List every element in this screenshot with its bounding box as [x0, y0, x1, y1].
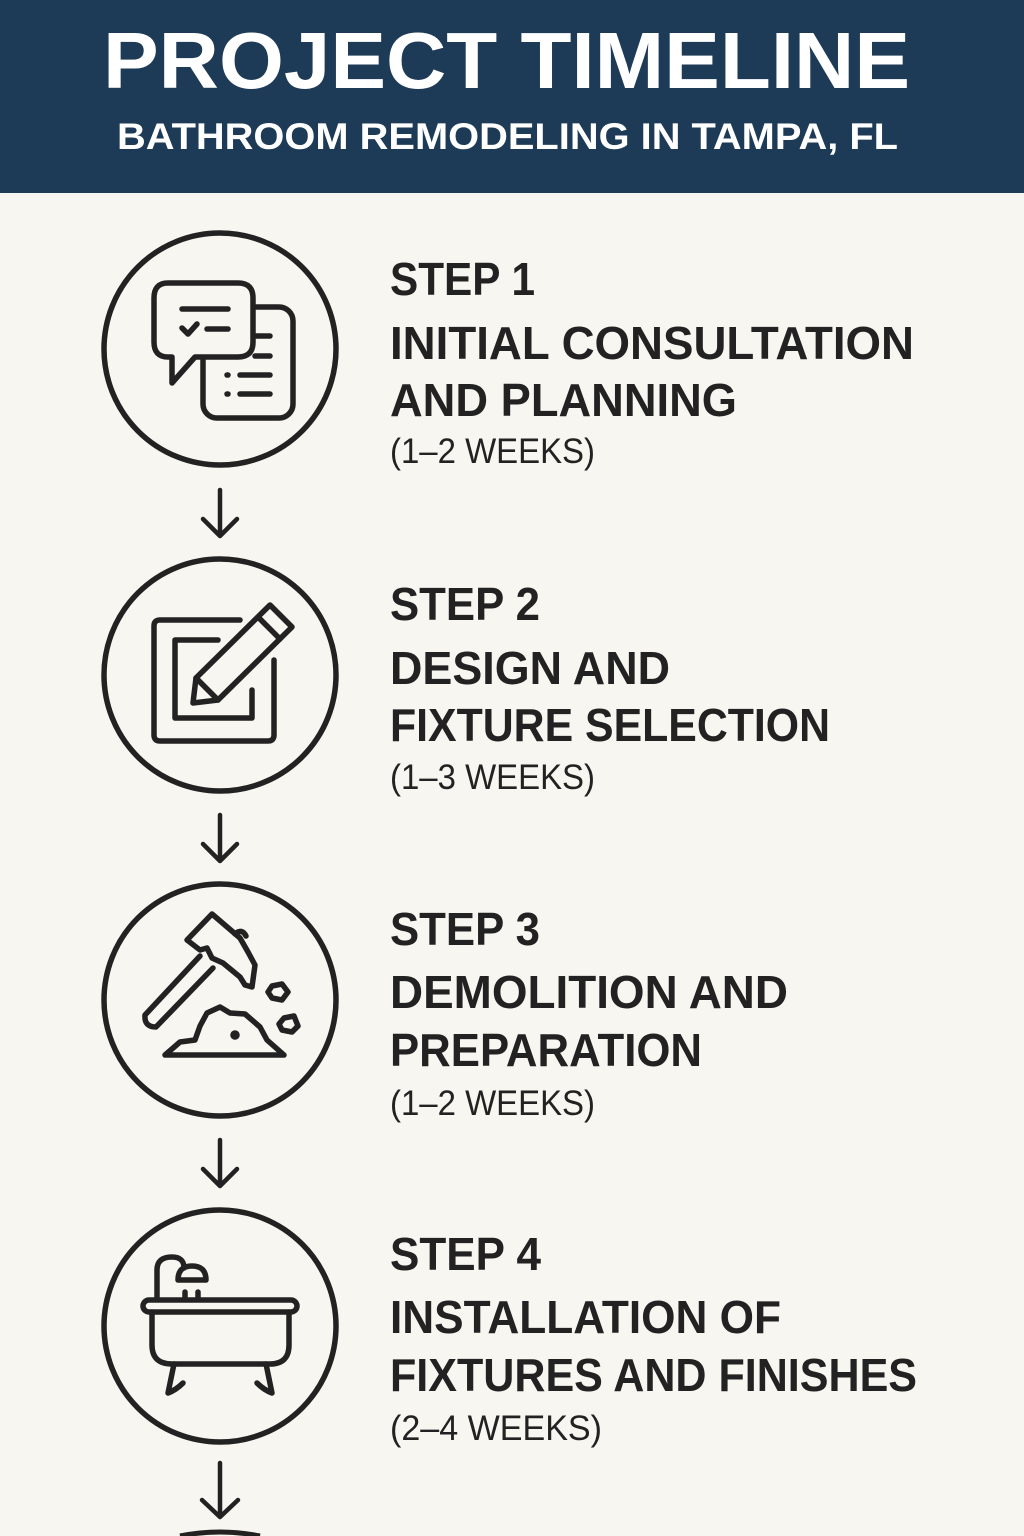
step 3 text: DEMOLITION AND — [390, 966, 788, 1018]
step 3 text — [390, 903, 788, 1123]
step 2 text: FIXTURE SELECTION — [390, 699, 830, 751]
step 3 text: (1–2 WEEKS) — [390, 1084, 595, 1123]
step 1 text: (1–2 WEEKS) — [390, 432, 595, 471]
icon: hammer and rubble — [104, 884, 336, 1116]
step 2 text — [390, 578, 830, 797]
icon: bathtub with shower — [104, 1210, 336, 1442]
arrow 3 — [203, 1140, 237, 1186]
arrow 1 — [203, 490, 237, 536]
step 1 — [104, 233, 914, 471]
step 1 text: INITIAL CONSULTATION — [390, 317, 914, 369]
step 1 text: STEP 1 — [390, 253, 535, 305]
step 2 text: (1–3 WEEKS) — [390, 758, 595, 797]
step 4 text — [390, 1228, 917, 1448]
icon: design pencil — [104, 559, 336, 791]
arrow 2 — [203, 815, 237, 861]
title: PROJECT TIMELINE — [103, 16, 910, 105]
icon: consultation chat and document — [104, 233, 336, 465]
step 5 circle (cropped) — [180, 1532, 260, 1536]
step 4 text: FIXTURES AND FINISHES — [390, 1349, 917, 1401]
header banner — [0, 0, 1024, 193]
step 2 — [104, 559, 830, 797]
step 4 text: (2–4 WEEKS) — [390, 1409, 602, 1448]
step 3 text: PREPARATION — [390, 1024, 702, 1076]
step 1 text — [390, 253, 914, 471]
arrow 4 — [202, 1463, 238, 1517]
step 3 — [104, 884, 788, 1123]
step 2 text: DESIGN AND — [390, 642, 670, 694]
step 4 — [104, 1210, 917, 1448]
step 4 text: INSTALLATION OF — [390, 1291, 781, 1343]
step 2 text: STEP 2 — [390, 578, 540, 630]
step 1 text: AND PLANNING — [390, 374, 737, 426]
step 3 text: STEP 3 — [390, 903, 540, 955]
step 4 text: STEP 4 — [390, 1228, 541, 1280]
subtitle: BATHROOM REMODELING IN TAMPA, FL — [117, 116, 898, 157]
